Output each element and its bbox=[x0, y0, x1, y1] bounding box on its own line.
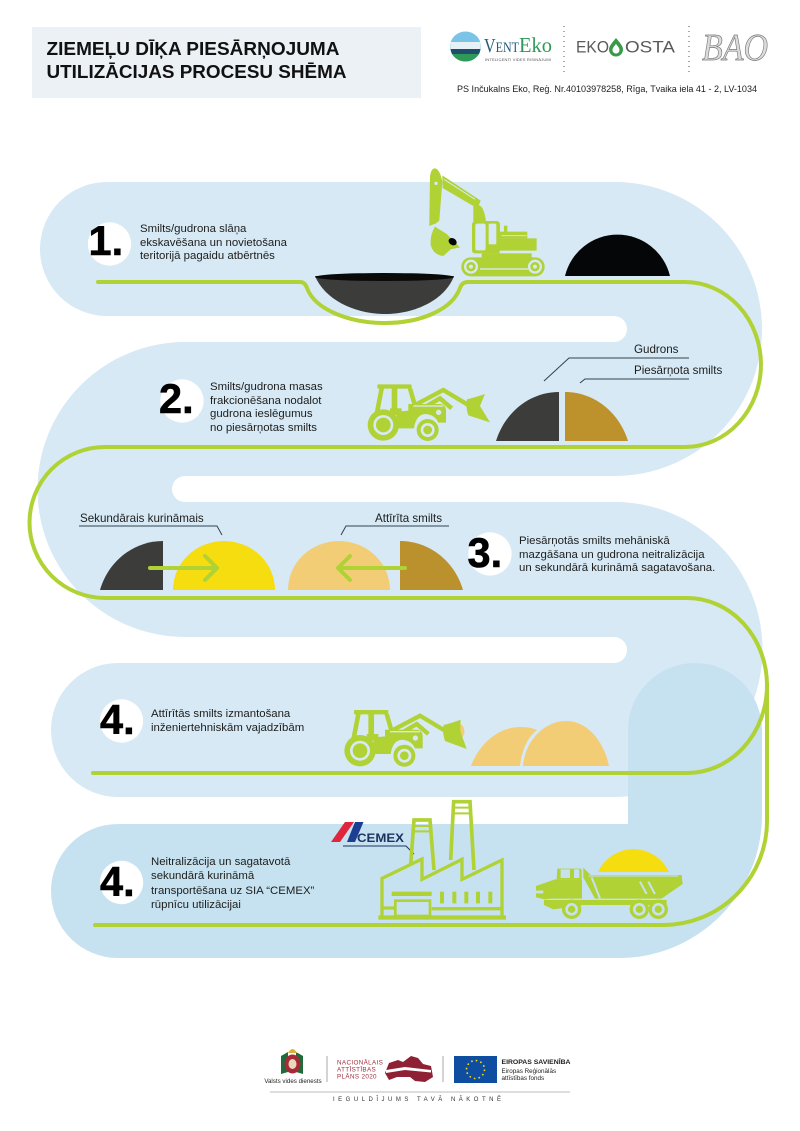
step 3 text: mazgāšana un gudrona neitralizācija bbox=[519, 549, 705, 561]
title panel bbox=[32, 27, 421, 98]
final step text: rūpnīcu utilizācijai bbox=[151, 899, 241, 911]
step 3 text: Piesārņotās smilts mehāniskā bbox=[519, 535, 670, 547]
footer logo: Nacionālais attīstības plāns 2020 bbox=[337, 1056, 433, 1082]
footer text: Eiropas Savienība: EIROPAS SAVIENĪBA bbox=[502, 1058, 571, 1066]
logo: CEMEX bbox=[331, 822, 414, 854]
final step text: sekundārā kurināmā bbox=[151, 870, 255, 882]
icon: excavator bbox=[429, 168, 545, 276]
footer text: Eiropas Savienība: attīstības fonds bbox=[502, 1075, 544, 1082]
footer divider bbox=[327, 1056, 443, 1082]
logo: BAO: BAO bbox=[702, 27, 768, 69]
step 2 text: Smilts/gudrona masas bbox=[210, 381, 323, 393]
logo: Eko Osta bbox=[576, 38, 676, 56]
footer logo: Valsts vides dienests bbox=[264, 1049, 322, 1085]
icon: loader with sand bbox=[344, 710, 467, 767]
step 4 text: Attīrītās smilts izmantošana bbox=[151, 708, 291, 720]
step 1 text bbox=[140, 223, 288, 262]
icon: dump truck bbox=[536, 868, 683, 919]
footer logo: EU flag bbox=[454, 1056, 497, 1083]
step 2 split heap: tar bbox=[496, 392, 559, 441]
arrow to secondary fuel bbox=[150, 556, 217, 580]
green process line bbox=[30, 282, 767, 773]
logo: VentEko: Eko bbox=[519, 33, 552, 57]
arrow to cleaned sand bbox=[338, 556, 405, 580]
logo: Eko Osta: OSTA bbox=[625, 38, 676, 56]
background ribbon: steps 1 to 4 bbox=[38, 182, 762, 797]
logo: VentEko: INTELIĢENTI VIDES RISINĀJUMI bbox=[485, 57, 551, 62]
step 3 text bbox=[519, 535, 715, 574]
label: Piesārņota smilts: Piesārņota smilts bbox=[634, 364, 722, 377]
label: Sekundārais kurināmais bbox=[79, 512, 222, 535]
logo: VentEko: VENT bbox=[484, 35, 519, 57]
title panel: UTILIZĀCIJAS PROCESU SHĒMA bbox=[46, 61, 346, 82]
step 1 tar heap bbox=[565, 235, 670, 276]
final step text bbox=[151, 856, 315, 911]
step 3 heap: tar bbox=[100, 541, 163, 590]
footer logo: Nacionālais attīstības plāns 2020: ATTĪSTĪBAS bbox=[337, 1066, 376, 1074]
step 2 text bbox=[210, 381, 323, 434]
step 4 sand heaps bbox=[471, 721, 609, 766]
footer text: Eiropas Savienība: Eiropas Reģionālās bbox=[502, 1067, 556, 1075]
footer tagline: IEGULDĪJUMS TAVĀ NĀKOTNĒ bbox=[333, 1096, 501, 1103]
step 1 text: teritorijā pagaidu atbērtnēs bbox=[140, 250, 275, 262]
step 2 text: frakcionēšana nodalot bbox=[210, 395, 322, 407]
background ribbon: final step bbox=[51, 663, 762, 958]
footer logo: Nacionālais attīstības plāns 2020: NACIONĀLAIS bbox=[337, 1058, 383, 1066]
step 3 heap: contaminated sand bbox=[400, 541, 463, 590]
footer logo: Nacionālais attīstības plāns 2020: PLĀNS 2020 bbox=[337, 1072, 377, 1080]
green process line: final segment bbox=[95, 683, 767, 925]
final step text: Neitralizācija un sagatavotā bbox=[151, 856, 291, 868]
label: Attīrīta smilts bbox=[341, 512, 449, 535]
footer logo: Valsts vides dienests: Valsts vides dienests bbox=[264, 1078, 322, 1085]
step 2 split heap: contaminated sand bbox=[565, 392, 628, 441]
final step text: transportēšana uz SIA “CEMEX” bbox=[151, 885, 315, 897]
logo divider dots bbox=[564, 26, 689, 74]
step 1 badge: 1. bbox=[88, 217, 123, 264]
step 4 text bbox=[151, 708, 304, 734]
step 1 pit bbox=[315, 273, 454, 314]
logo: Eko Osta: EKO bbox=[576, 38, 609, 56]
step 3 heap: secondary fuel bbox=[173, 541, 275, 590]
step 2 text: no piesārņotas smilts bbox=[210, 422, 317, 434]
logo: VentEko bbox=[450, 32, 552, 62]
label: Gudrons: Gudrons bbox=[634, 343, 679, 356]
icon: factory bbox=[378, 802, 506, 920]
title panel: ZIEMEĻU DĪĶA PIESĀRŅOJUMA bbox=[46, 38, 339, 59]
label: Gudrons bbox=[544, 343, 689, 381]
footer rule bbox=[270, 1091, 570, 1093]
final step badge: 4. bbox=[100, 858, 135, 905]
step 4 text: inženiertehniskām vajadzībām bbox=[151, 722, 304, 734]
step 1 text: Smilts/gudrona slāņa bbox=[140, 223, 247, 235]
logo: CEMEX: CEMEX bbox=[357, 831, 404, 845]
footer text: Eiropas Savienība bbox=[502, 1058, 571, 1082]
label: Piesārņota smilts bbox=[580, 364, 722, 383]
icon: front loader tractor bbox=[368, 384, 490, 441]
step 3 heap: cleaned sand bbox=[288, 541, 390, 590]
step 4 badge: 4. bbox=[100, 696, 135, 743]
step 1 text: ekskavēšana un novietošana bbox=[140, 237, 288, 249]
step 3 badge: 3. bbox=[468, 529, 502, 576]
step 3 text: un sekundārā kurināmā sagatavošana. bbox=[519, 562, 715, 574]
label: Attīrīta smilts: Attīrīta smilts bbox=[375, 512, 442, 525]
step 2 text: gudrona ieslēgumus bbox=[210, 408, 313, 420]
step 2 badge: 2. bbox=[159, 375, 194, 422]
truck load bbox=[598, 849, 669, 872]
label: Sekundārais kurināmais: Sekundārais kurināmais bbox=[80, 512, 204, 525]
company address: PS Inčukalns Eko, Reģ. Nr.40103978258, Rīga, Tvaika iela 41 - 2, LV-1034 bbox=[457, 84, 757, 94]
